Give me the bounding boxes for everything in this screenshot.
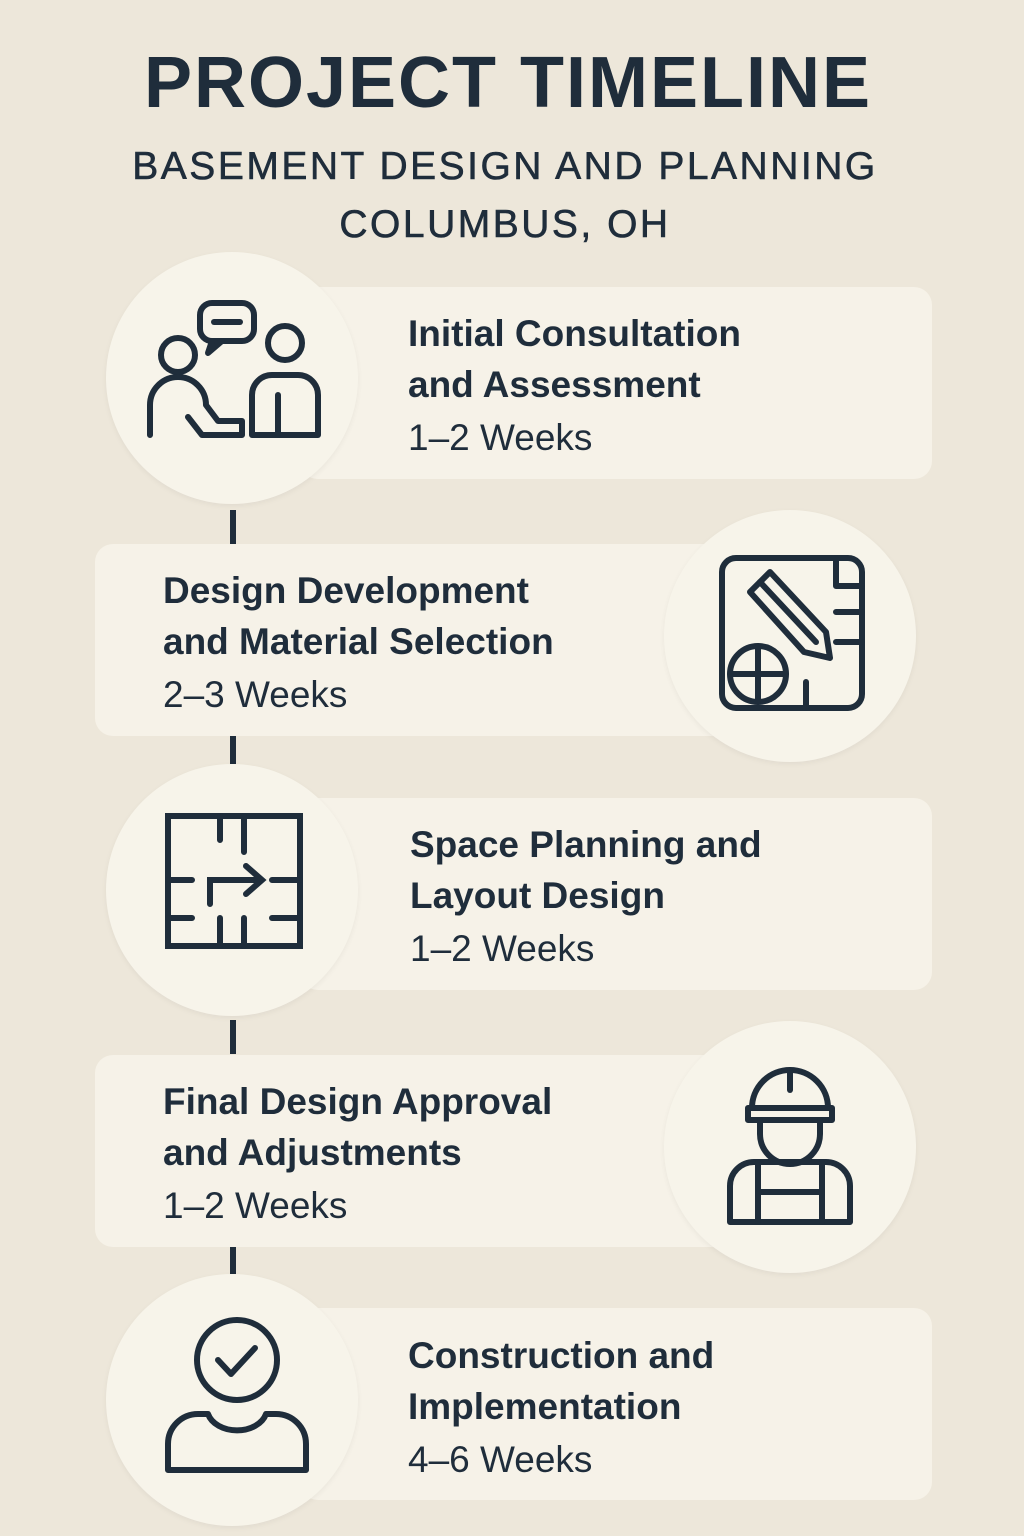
icon: floor plan [165,813,303,949]
connector lines [230,510,236,1274]
text 1: 1–2 Weeks [408,417,592,458]
card 1 [300,287,932,479]
text 4: 1–2 Weeks [163,1185,347,1226]
subtitle [132,145,878,246]
circle 1 [106,252,358,504]
text 2 [163,570,554,715]
title: PROJECT TIMELINE [144,43,872,123]
subtitle: BASEMENT DESIGN AND PLANNING [132,145,878,188]
icon: consultation [147,300,321,438]
card 5 [300,1308,932,1500]
text 1 [408,313,741,458]
circle 4 [664,1021,916,1273]
text 5 [408,1335,714,1480]
text 3 [410,824,762,969]
card 2 [95,544,785,736]
text 2: and Material Selection [163,621,554,662]
card 3 [300,798,932,990]
text 5: Implementation [408,1386,681,1427]
icon: worker [727,1067,853,1225]
circle 3 [106,764,358,1016]
subtitle: COLUMBUS, OH [339,203,671,246]
text 4: and Adjustments [163,1132,462,1173]
text 4: Final Design Approval [163,1081,552,1122]
circle 5 [106,1274,358,1526]
text 3: Space Planning and [410,824,762,865]
circle 2 [664,510,916,762]
text 3: Layout Design [410,875,665,916]
text 1: and Assessment [408,364,701,405]
text 5: 4–6 Weeks [408,1439,592,1480]
card 4 [95,1055,785,1247]
icon: person check [165,1317,309,1473]
text 4 [163,1081,552,1226]
text 2: Design Development [163,570,529,611]
icon: blueprint pencil [719,555,865,711]
text 2: 2–3 Weeks [163,674,347,715]
text 5: Construction and [408,1335,714,1376]
text 1: Initial Consultation [408,313,741,354]
text 3: 1–2 Weeks [410,928,594,969]
